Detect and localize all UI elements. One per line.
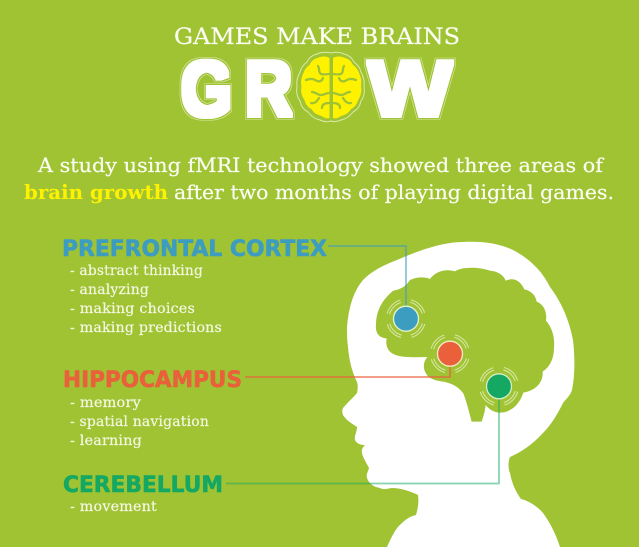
hippocampus list: - spatial navigation	[70, 414, 209, 430]
prefrontal cortex list: - analyzing	[70, 282, 149, 298]
title: GROW	[181, 44, 452, 132]
title: GROW: R	[245, 44, 292, 132]
title: GROW: W	[368, 44, 452, 132]
prefrontal cortex list: - abstract thinking	[70, 263, 203, 279]
icon: yellow brain	[297, 52, 364, 122]
connector: hippocampus	[245, 362, 450, 377]
prefrontal cortex list: - making predictions	[70, 320, 222, 336]
prefrontal cortex list: - making choices	[70, 301, 195, 317]
hippocampus list: - learning	[70, 433, 142, 449]
title: GROW: O	[310, 114, 311, 116]
intro text: brain growth	[24, 180, 168, 204]
marker: prefrontal cortex	[386, 299, 426, 338]
cerebellum heading: CEREBELLUM	[63, 473, 223, 498]
hippocampus list: - memory	[70, 395, 141, 411]
cerebellum list: - movement	[70, 499, 157, 515]
connector: prefrontal cortex	[328, 246, 406, 308]
intro text	[24, 153, 614, 204]
connector: cerebellum	[226, 395, 499, 484]
marker: hippocampus	[430, 334, 470, 373]
intro text: after two months of playing digital games.	[174, 180, 614, 204]
hippocampus list	[70, 395, 209, 449]
prefrontal cortex heading: PREFRONTAL CORTEX	[62, 237, 327, 262]
marker: cerebellum	[480, 367, 518, 406]
brain silhouette	[376, 268, 554, 422]
child head silhouette	[342, 242, 574, 547]
hippocampus heading: HIPPOCAMPUS	[63, 368, 242, 393]
prefrontal cortex list	[70, 263, 222, 336]
intro text: A study using fMRI technology showed three areas of	[37, 153, 605, 177]
title: GROW: G	[181, 44, 232, 132]
title: games make brains: GAMES MAKE BRAINS	[174, 25, 460, 50]
